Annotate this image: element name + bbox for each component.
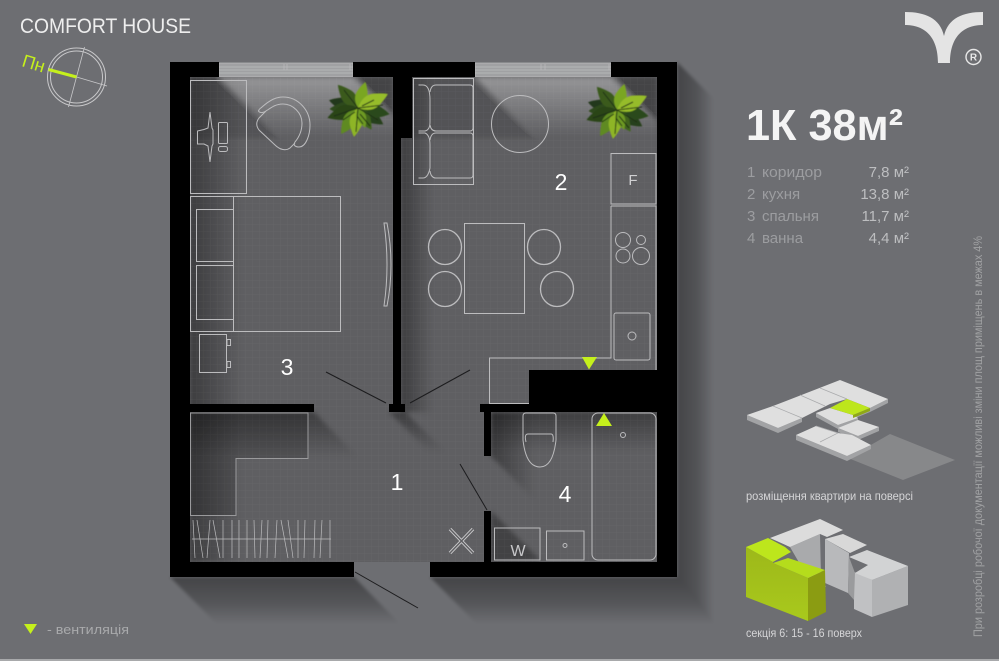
disclaimer: При розробці робочої документації можливі зміни площ приміщень в межах 4% bbox=[973, 236, 985, 637]
bathtub bbox=[592, 413, 656, 560]
desk bbox=[190, 80, 246, 194]
floor position caption: розміщення квартири на поверсі bbox=[746, 489, 913, 503]
corridor closet bbox=[190, 413, 308, 516]
washer bbox=[494, 528, 540, 560]
hangers bbox=[192, 520, 331, 558]
bed bbox=[190, 196, 340, 332]
section diagram bbox=[746, 519, 908, 621]
room numbers: 2 bbox=[555, 169, 567, 195]
ventilation markers bbox=[582, 357, 612, 426]
light and shadows on floor bbox=[190, 77, 657, 562]
logo: R bbox=[970, 52, 978, 64]
bathroom fixtures bbox=[494, 413, 656, 560]
fridge label: F bbox=[628, 172, 638, 189]
legend: - вентиляція bbox=[47, 622, 129, 637]
area table bbox=[747, 164, 909, 247]
area table: ванна bbox=[762, 230, 804, 247]
counter bbox=[490, 206, 656, 404]
chairs bbox=[428, 230, 574, 306]
area table: коридор bbox=[762, 164, 822, 181]
area table: 4 bbox=[747, 230, 755, 247]
area table: 11,7 м² bbox=[861, 208, 909, 225]
area table: 4,4 м² bbox=[869, 230, 909, 247]
plant room 2 bbox=[584, 82, 650, 140]
fridge bbox=[611, 154, 656, 204]
doors bbox=[326, 370, 487, 608]
plant room 3 bbox=[325, 80, 391, 138]
dining table bbox=[464, 224, 524, 314]
nightstand bbox=[200, 334, 230, 372]
room numbers: 3 bbox=[281, 354, 293, 380]
title: COMFORT HOUSE bbox=[20, 15, 191, 38]
washer label: W bbox=[510, 543, 526, 560]
apartment heading: 1К 38м² bbox=[746, 101, 903, 150]
area table: 7,8 м² bbox=[869, 164, 909, 181]
room numbers: 1 bbox=[391, 469, 403, 495]
area table: 3 bbox=[747, 208, 755, 225]
area table: спальня bbox=[762, 208, 819, 225]
armchair bbox=[257, 97, 310, 150]
room 3 furniture bbox=[190, 80, 391, 372]
logo bbox=[905, 12, 983, 64]
section caption: секція 6: 15 - 16 поверх bbox=[746, 626, 862, 640]
round table bbox=[492, 96, 548, 152]
area table: 13,8 м² bbox=[860, 186, 909, 203]
room numbers bbox=[281, 169, 572, 507]
kitchen furniture bbox=[414, 78, 656, 404]
outer wall shadow bbox=[170, 62, 714, 624]
hob bbox=[616, 232, 650, 264]
floor bbox=[190, 77, 657, 562]
compass bbox=[20, 47, 107, 107]
floor position diagram bbox=[747, 380, 955, 480]
area table: кухня bbox=[762, 186, 800, 203]
sofa bbox=[414, 78, 474, 184]
sink bbox=[614, 313, 650, 360]
vent marks X bbox=[450, 529, 473, 553]
mirror bbox=[384, 223, 391, 306]
compass: Пн bbox=[20, 51, 48, 77]
bath sink bbox=[546, 531, 584, 560]
windows bbox=[219, 63, 611, 76]
toilet bbox=[523, 413, 556, 467]
walls bbox=[170, 62, 677, 577]
room numbers: 4 bbox=[559, 481, 572, 507]
area table: 2 bbox=[747, 186, 755, 203]
area table: 1 bbox=[747, 164, 755, 181]
